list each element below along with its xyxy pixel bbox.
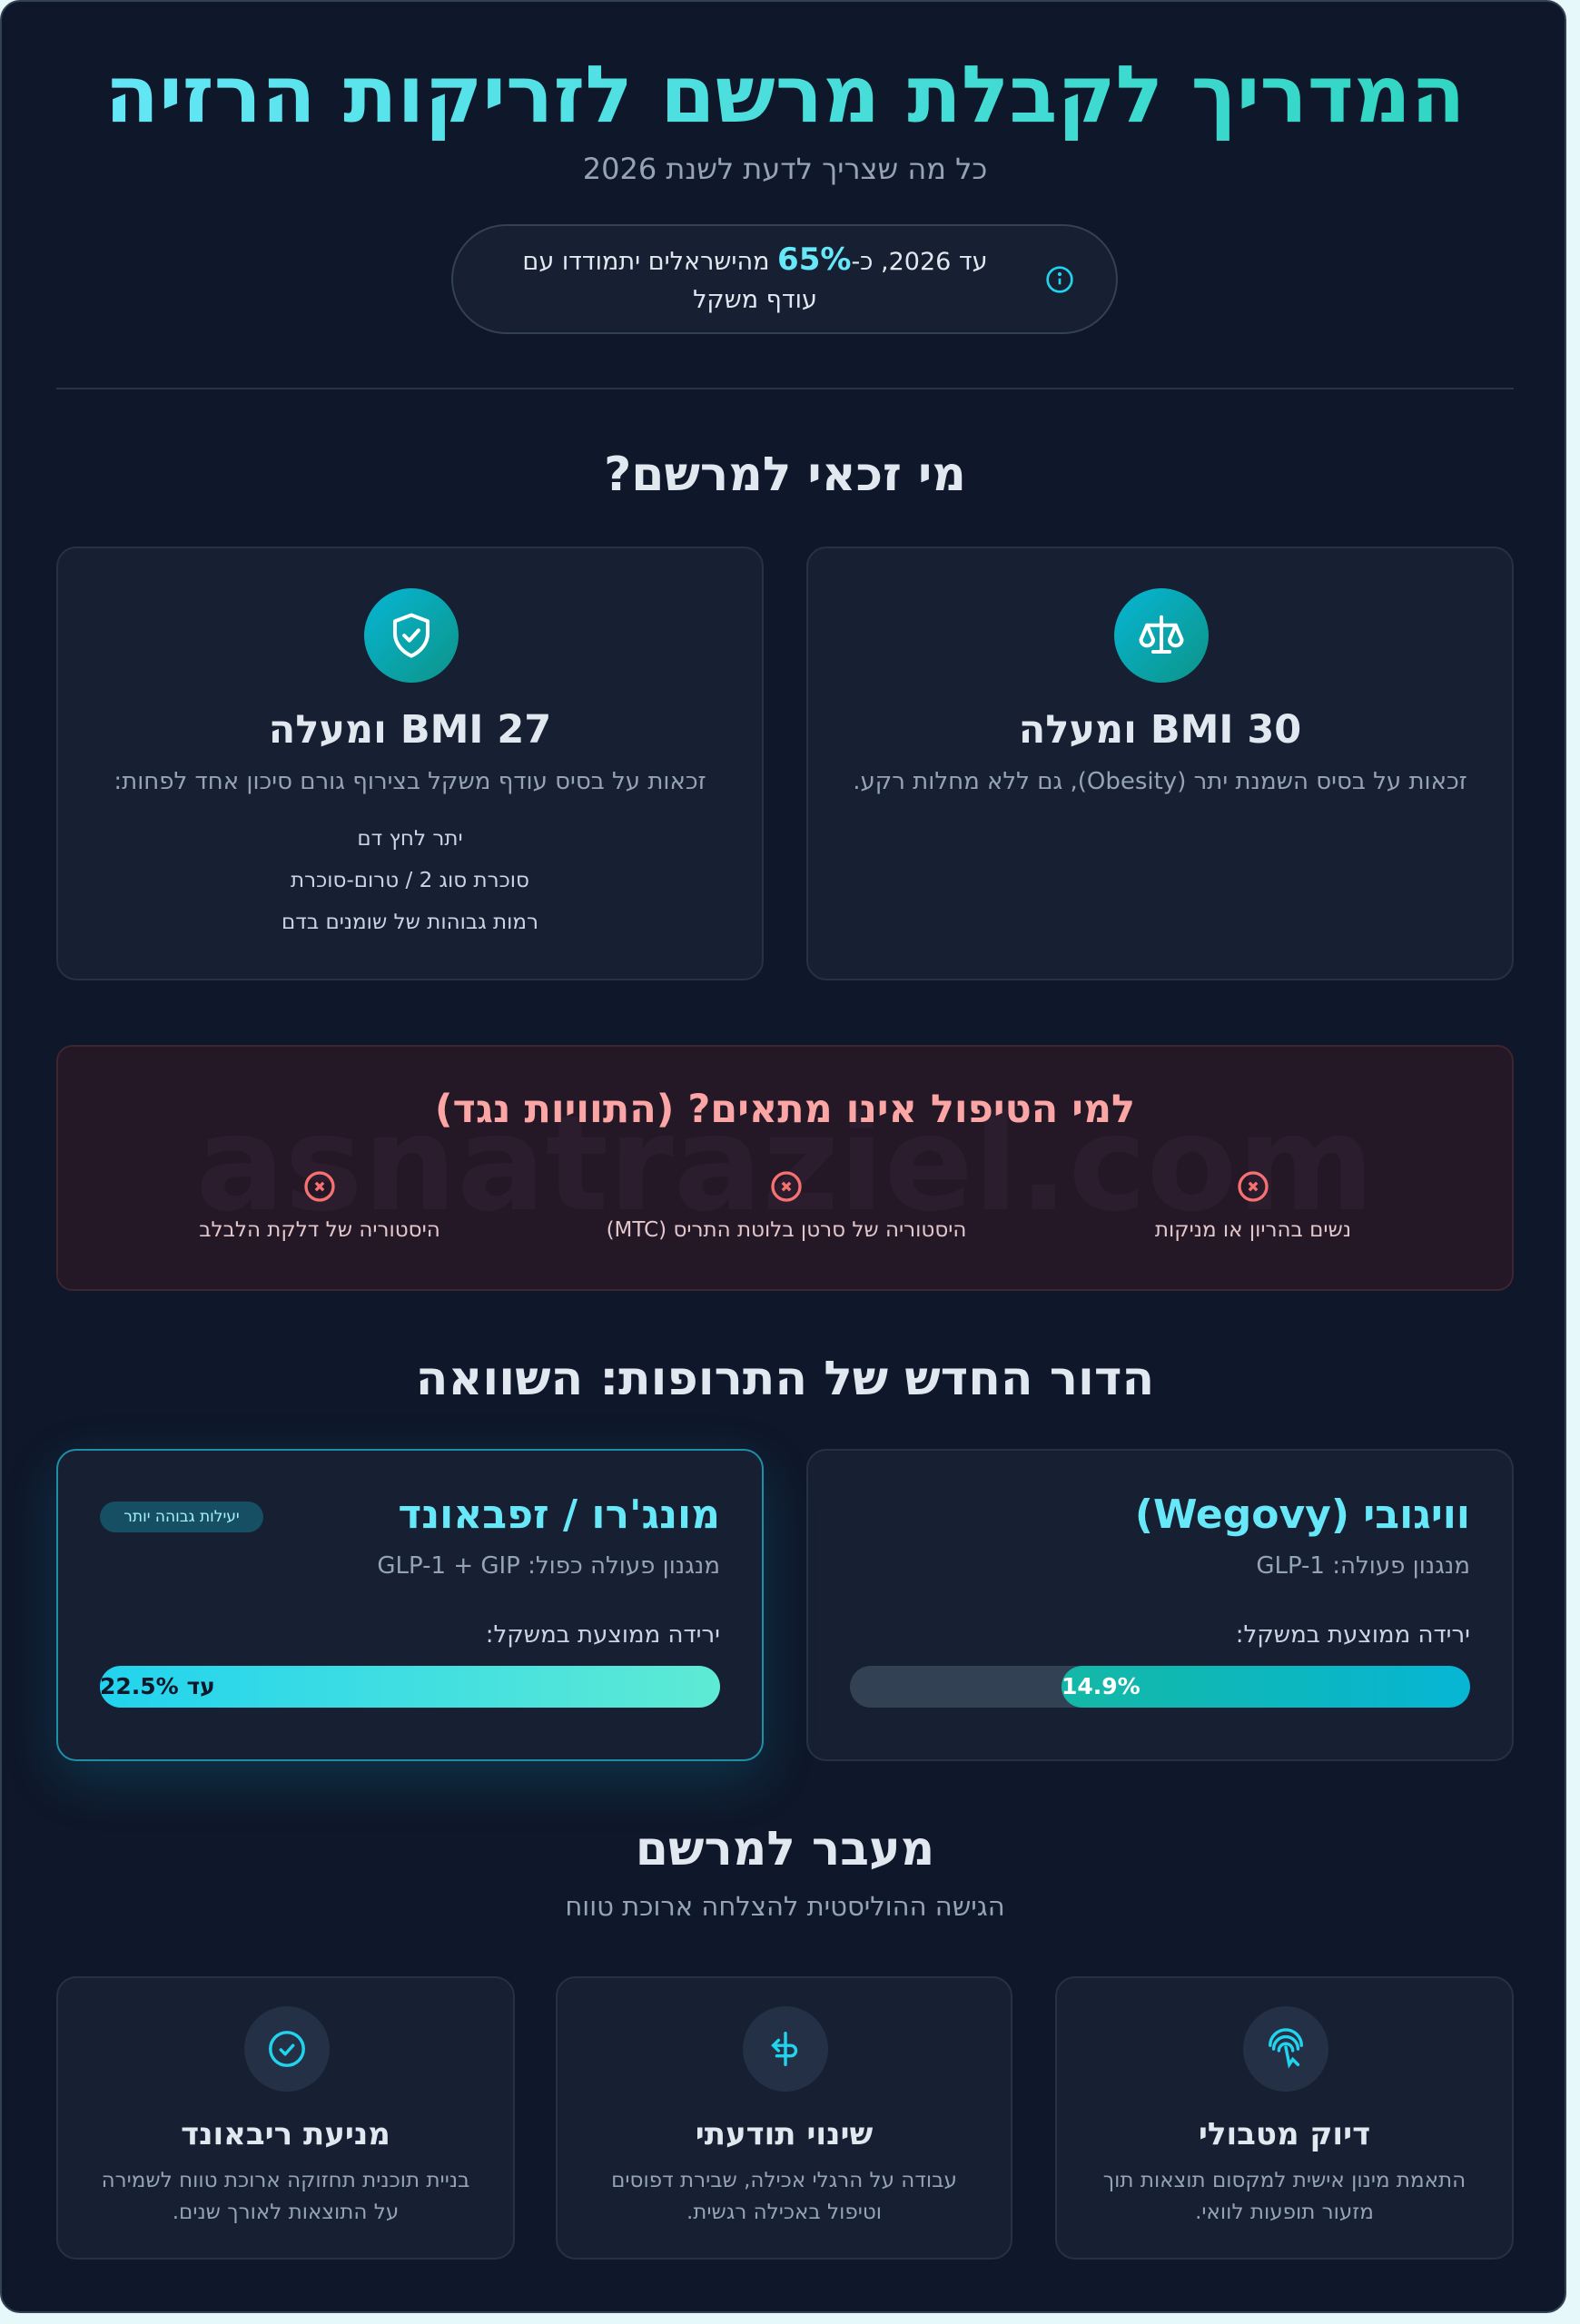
label: ירידה ממוצעת במשקל:	[1236, 1621, 1470, 1649]
icon: habit	[743, 2006, 828, 2092]
card description: זכאות על בסיס השמנת יתר (Obesity), גם ללא מחלות רקע.	[853, 768, 1467, 795]
heading: eligibility: מי זכאי למרשם?	[604, 448, 966, 502]
bar chart: 22.5%	[100, 1666, 720, 1708]
item: pregnancy: נשים בהריון או מניקות	[1155, 1218, 1351, 1242]
card description: בניית תוכנית תחזוקה ארוכת טווח לשמירה על התוצאות לאורך שנים.	[102, 2169, 469, 2224]
item: pregnancy	[1155, 1171, 1351, 1242]
item: MTC: היסטוריה של סרטן בלוטת התריס (MTC)	[607, 1218, 966, 1242]
bar chart: 14.9%	[850, 1666, 1470, 1708]
item: pancreatitis: היסטוריה של דלקת הלבלב	[199, 1218, 440, 1242]
card title: BMI 30 ומעלה	[1019, 707, 1301, 753]
card description: עבודה על הרגלי אכילה, שבירת דפוסים וטיפול באכילה רגשית.	[611, 2169, 957, 2224]
badge: יעילות גבוהה יותר	[123, 1508, 240, 1526]
drug title: וויגובי (Wegovy)	[1135, 1492, 1470, 1538]
mechanism: מנגנון פעולה: GLP-1	[1256, 1552, 1470, 1580]
panel: BMI 27	[56, 547, 764, 980]
subtitle: כל מה שצריך לדעת לשנת 2026	[583, 152, 987, 186]
item: MTC	[607, 1171, 966, 1242]
bar chart: 14.9%: 14.9%	[1062, 1673, 1141, 1699]
bar chart: 22.5%: עד 22.5%	[100, 1673, 215, 1699]
risk factor list	[281, 827, 538, 934]
icon: fingerprint pointer	[1243, 2006, 1328, 2092]
panel: Wegovy	[806, 1449, 1514, 1761]
contraindications title: למי הטיפול אינו מתאים? (התוויות נגד)	[435, 1087, 1135, 1132]
label: ירידה ממוצעת במשקל:	[486, 1621, 720, 1649]
card description: התאמת מינון אישית למקסום תוצאות תוך מזעור תופעות לוואי.	[1103, 2169, 1466, 2224]
stat text: עד 2026, כ-65% מהישראלים יתמודדו עם עודף משקל	[522, 241, 988, 314]
mechanism: מנגנון פעולה כפול: GLP-1 + GIP	[377, 1552, 720, 1580]
panel: conscious change	[556, 1976, 1012, 2260]
icon: shield	[364, 588, 459, 683]
drug title: מונג'רו / זפבאונד	[398, 1492, 720, 1538]
icon: scale	[1114, 588, 1209, 683]
icon: info	[1046, 266, 1073, 293]
risk factor list: רמות גבוהות של שומנים בדם	[281, 911, 538, 934]
watermark: asnatraziel.com	[196, 1088, 1374, 1241]
card description: זכאות על בסיס עודף משקל בצירוף גורם סיכון אחד לפחות:	[114, 768, 706, 795]
heading: comparison: הדור החדש של התרופות: השוואה	[416, 1352, 1154, 1406]
risk factor list: יתר לחץ דם	[357, 827, 463, 851]
card title: BMI 27 ומעלה	[269, 707, 551, 753]
panel: rebound prevention	[56, 1976, 515, 2260]
title: המדריך לקבלת מרשם לזריקות הרזיה	[104, 48, 1466, 141]
risk factor list: סוכרת סוג 2 / טרום-סוכרת	[291, 869, 529, 892]
panel: metabolic precision	[1055, 1976, 1514, 2260]
stat pill	[451, 224, 1118, 334]
item: pancreatitis	[199, 1171, 440, 1242]
subheading: הגישה ההוליסטית להצלחה ארוכת טווח	[565, 1891, 1005, 1922]
badge	[100, 1502, 263, 1532]
card title: דיוק מטבולי	[1199, 2116, 1370, 2152]
card title: מניעת ריבאונד	[181, 2116, 390, 2152]
heading: beyond prescription: מעבר למרשם	[636, 1822, 934, 1876]
panel: BMI 30	[806, 547, 1514, 980]
card title: שינוי תודעתי	[696, 2116, 873, 2152]
panel: Mounjaro	[56, 1449, 764, 1761]
panel: contraindications	[56, 1045, 1514, 1291]
icon: check circle	[244, 2006, 330, 2092]
